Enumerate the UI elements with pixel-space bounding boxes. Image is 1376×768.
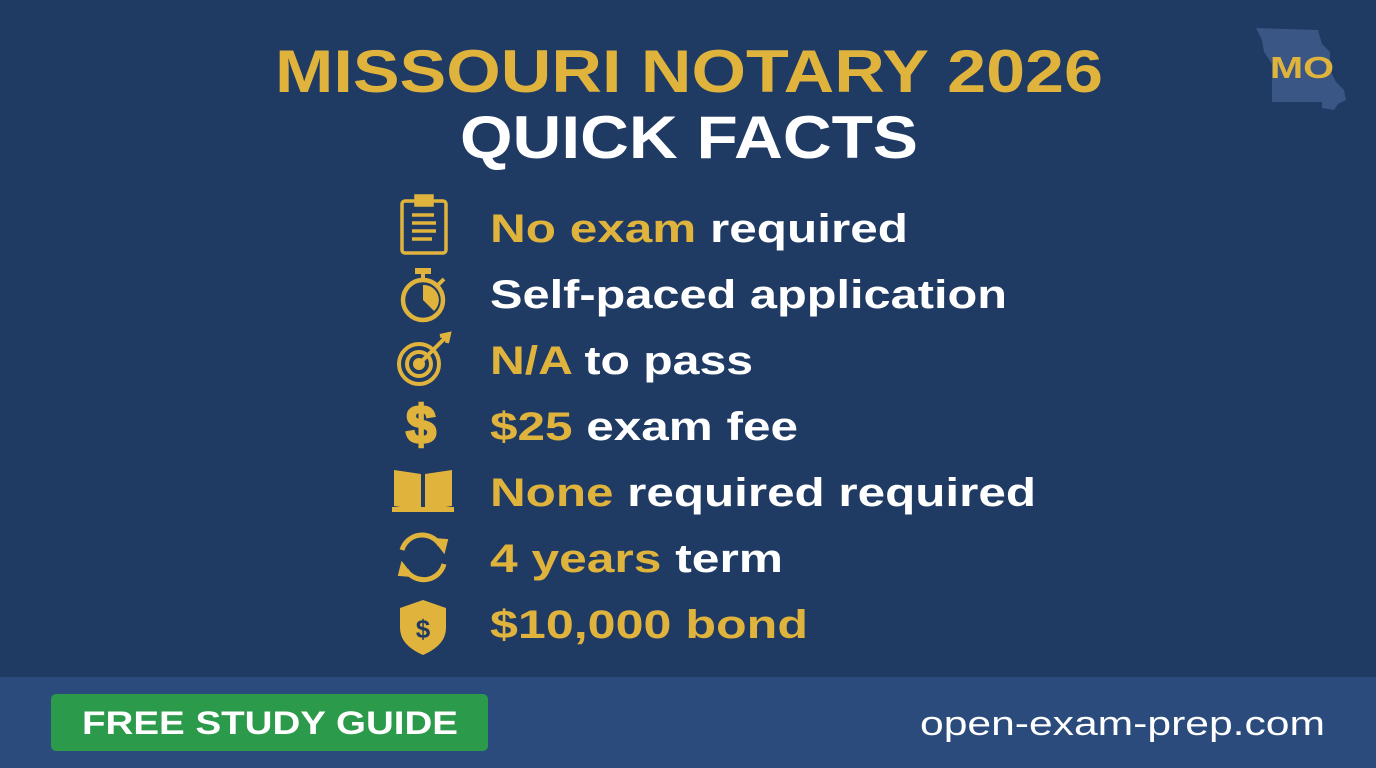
icon: stopwatch <box>403 268 444 320</box>
title: MISSOURI NOTARY 2026 <box>275 38 1103 105</box>
footer bar <box>0 677 1376 768</box>
fact list <box>392 196 1036 655</box>
button: free study guide <box>51 694 488 751</box>
fact: fee <box>406 395 798 455</box>
icon: book <box>392 470 454 512</box>
fact: no exam: No exam required <box>490 207 908 251</box>
icon: renew arrows <box>399 535 447 580</box>
title: QUICK FACTS <box>460 104 918 171</box>
title <box>275 38 1103 171</box>
icon: shield: $ <box>416 614 431 644</box>
icon: dollar: $ <box>406 395 436 455</box>
icon: clipboard <box>402 196 446 253</box>
fact: fee: $25 exam fee <box>490 405 798 449</box>
fact: pass <box>399 334 753 384</box>
fact: bond: $10,000 bond <box>490 603 808 647</box>
fact: term: 4 years term <box>490 537 783 581</box>
button: free study guide: FREE STUDY GUIDE <box>82 705 458 741</box>
fact: bond <box>400 600 808 655</box>
fact: term <box>399 535 783 581</box>
icon: target <box>399 334 449 384</box>
fact: education: None required required <box>490 471 1036 515</box>
fact: no exam <box>402 196 908 253</box>
icon: shield <box>400 600 446 655</box>
icon: Missouri state badge <box>1256 28 1346 110</box>
fact: self-paced: Self-paced application <box>490 273 1007 317</box>
website url: open-exam-prep.com <box>920 705 1325 743</box>
fact: pass: N/A to pass <box>490 339 753 383</box>
fact: self-paced <box>403 268 1007 320</box>
icon: Missouri state badge: MO <box>1270 50 1334 85</box>
